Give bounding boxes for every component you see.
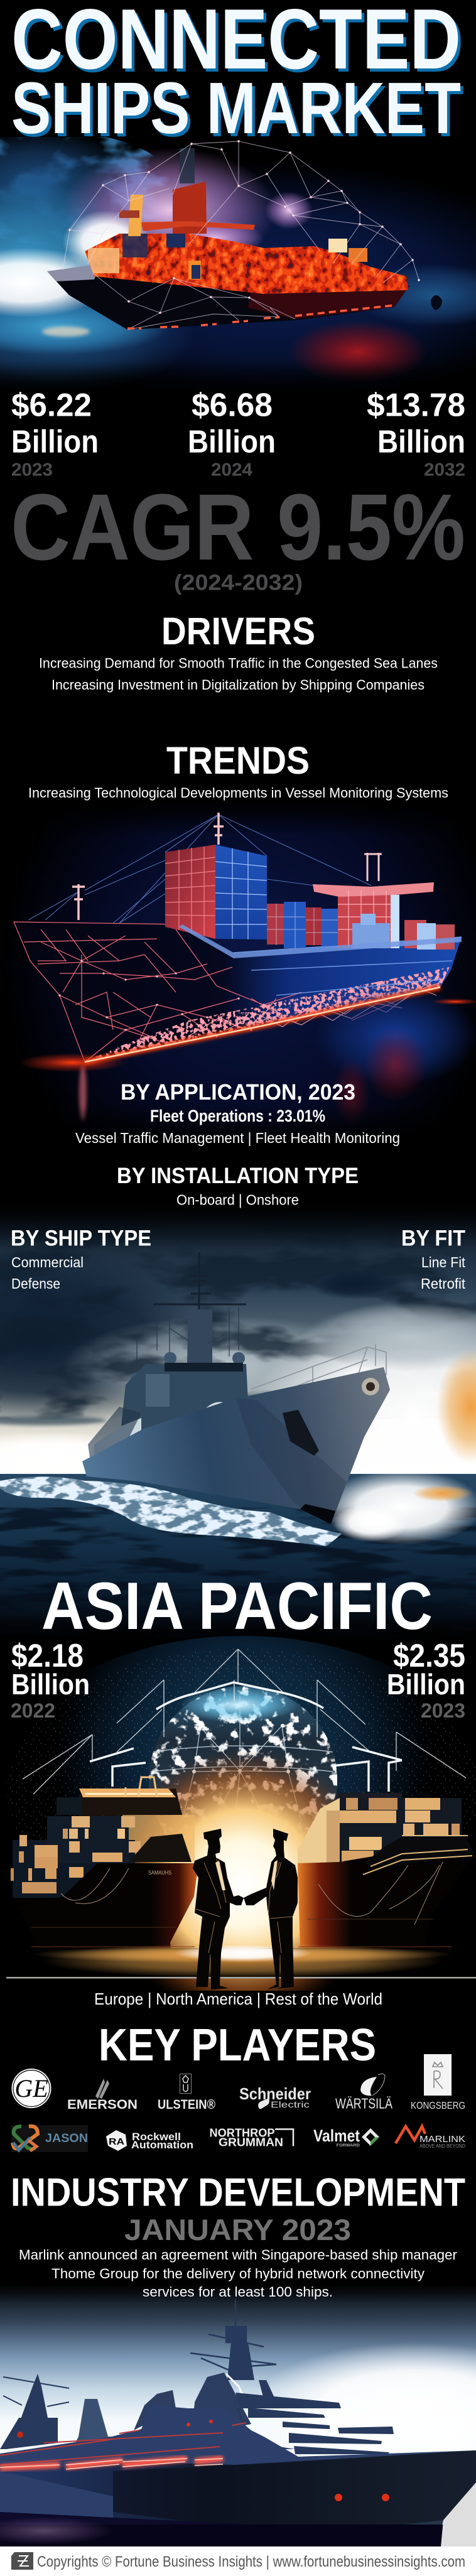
panel: drivers: DRIVERS <box>161 610 315 652</box>
stat: 2023 value <box>11 387 99 480</box>
dense lower mesh <box>90 967 450 1060</box>
panel: drivers: Increasing Demand for Smooth Traffic in the Congested Sea Lanes <box>39 656 438 671</box>
logo: GE <box>11 2069 51 2108</box>
logo: Jason: JASON <box>45 2132 88 2145</box>
superstructure and hull <box>0 2405 476 2534</box>
logo: Northrop Grumman: GRUMMAN <box>219 2136 283 2149</box>
title <box>11 0 461 149</box>
panel: trends: TRENDS <box>166 739 310 782</box>
panel: by ship type: Defense <box>11 1275 60 1292</box>
stays and masts <box>28 813 382 923</box>
stat: 2023 value: Billion <box>11 423 99 460</box>
ship bridge tower and crane <box>119 148 367 262</box>
cranes <box>23 1649 466 1794</box>
logo: Rockwell Automation: RA <box>109 2136 124 2147</box>
sea <box>0 1474 476 1642</box>
stat: 2024 value: 2024 <box>211 460 252 480</box>
bridge superstructure <box>313 882 455 950</box>
stat: 2024 value: $6.68 <box>192 387 273 423</box>
panel: industry development: services for at least 100 ships. <box>143 2284 333 2300</box>
panel: industry development: JANUARY 2023 <box>124 2213 351 2246</box>
bow wake foam <box>0 1477 402 1546</box>
logo: GE: GE <box>14 2074 48 2102</box>
panel: by fit: BY FIT <box>401 1226 465 1251</box>
logo: Kongsberg: KONGSBERG <box>411 2101 465 2111</box>
network mesh <box>63 141 419 330</box>
right ship <box>298 1793 474 1948</box>
logo: Valmet: Valmet <box>313 2126 360 2145</box>
logo: Ulstein: ULSTEIN® <box>158 2097 215 2112</box>
silhouette: left officer <box>193 1829 244 1989</box>
panel: trends <box>28 739 448 801</box>
main container stack <box>165 845 267 939</box>
hull <box>14 922 462 1062</box>
panel: market values <box>11 387 465 480</box>
globe <box>149 1686 337 1835</box>
central glow <box>129 1751 339 1991</box>
container stacks <box>85 234 408 294</box>
warship hull <box>82 1367 390 1524</box>
logo: Marlink: ABOVE AND BEYOND <box>419 2143 465 2149</box>
other regions text: Europe | North America | Rest of the World <box>94 1989 382 2008</box>
panel: by fit <box>401 1226 466 1292</box>
logo: Schneider Electric <box>239 2084 311 2109</box>
logo: Schneider Electric: Schneider <box>239 2084 311 2103</box>
water bottom <box>0 2512 440 2534</box>
logo: Northrop Grumman <box>210 2126 293 2149</box>
stat: 2032 value: 2032 <box>424 460 465 480</box>
logo: Emerson <box>67 2079 138 2112</box>
logo: Jason <box>11 2125 88 2152</box>
heading: Asia Pacific: ASIA PACIFIC <box>41 1568 433 1643</box>
stat: 2032 value <box>367 387 465 480</box>
panel: by ship type: Commercial <box>11 1254 84 1270</box>
heading: key players: KEY PLAYERS <box>99 2020 376 2070</box>
icon: Fortune Business Insights logo <box>11 2552 33 2570</box>
CAGR heading: (2024-2032) <box>174 570 303 595</box>
logo: Wartsila <box>335 2074 393 2111</box>
panel: by ship type <box>11 1226 151 1292</box>
hull mesh <box>14 922 433 1062</box>
stat: 2023 value: 2023 <box>11 460 53 480</box>
panel: globe and handshake image <box>0 1636 476 2019</box>
panel: Asia Pacific 2023 value: 2023 <box>421 1699 465 1722</box>
panel: by installation type <box>117 1163 359 1208</box>
panel: Asia Pacific 2022 value: $2.18 <box>11 1638 84 1674</box>
logo: Northrop Grumman: NORTHROP <box>210 2126 275 2139</box>
ground glow <box>0 1919 476 1978</box>
stat: 2024 value: Billion <box>188 423 276 460</box>
panel: by installation type: BY INSTALLATION TYPE <box>117 1163 359 1188</box>
red deck stripes <box>0 2423 246 2465</box>
panel: by application <box>75 1080 400 1146</box>
panel: Asia Pacific 2023 value <box>387 1638 465 1722</box>
footer <box>0 2546 476 2576</box>
panel: industry development: Marlink announced an agreement with Singapore-based ship manager <box>19 2247 458 2263</box>
panel: drivers: Increasing Investment in Digitalization by Shipping Companies <box>51 677 425 693</box>
panel: Asia Pacific 2022 value: Billion <box>11 1668 90 1701</box>
panel: by fit: Retrofit <box>421 1275 466 1292</box>
logo: Emerson: EMERSON <box>67 2097 138 2112</box>
panel: Asia Pacific 2022 value: 2022 <box>11 1699 55 1722</box>
mast rear ship <box>0 2374 112 2449</box>
stat: 2024 value <box>188 387 276 480</box>
panel: bottom warship image <box>0 2286 476 2546</box>
panel: by application: Fleet Operations : 23.01% <box>150 1107 325 1125</box>
deck base <box>179 924 462 958</box>
warship anchor and hawse <box>283 1378 379 1456</box>
logo: Wartsila: WÄRTSILÄ <box>335 2095 393 2111</box>
deck line and blue hull lights <box>234 937 462 995</box>
panel: industry development: Thome Group for the delivery of hybrid network connectivity <box>51 2266 425 2281</box>
panel: industry development <box>11 2170 465 2300</box>
logo: Rockwell Automation: Rockwell <box>132 2131 181 2143</box>
logo: Ulstein <box>158 2074 215 2112</box>
suit details <box>196 1859 293 1953</box>
glowing red lights <box>0 2420 389 2501</box>
silhouette: right officer <box>244 1829 298 1989</box>
logo: Kongsberg <box>411 2054 465 2111</box>
warship bow railing <box>251 1344 387 1389</box>
panel: Asia Pacific 2023 value: Billion <box>387 1668 465 1701</box>
stat: 2023 value: $6.22 <box>11 387 92 423</box>
panel: by application: BY APPLICATION, 2023 <box>121 1080 355 1105</box>
ship hull <box>47 271 409 330</box>
stat: 2032 value: $13.78 <box>367 387 465 423</box>
glowing keel line <box>85 987 440 1062</box>
panel: Asia Pacific 2023 value: $2.35 <box>393 1638 465 1674</box>
left ship: SAMAUHS <box>148 1870 171 1876</box>
stat: 2032 value: Billion <box>377 423 465 460</box>
logo: Marlink: MARLINK <box>419 2134 465 2145</box>
panel: hero image connected cargo ship <box>0 129 476 402</box>
logo: Rockwell Automation: Automation <box>131 2139 193 2151</box>
logo: Marlink <box>396 2126 465 2149</box>
warship mast and superstructure <box>88 1252 248 1473</box>
panel: wireframe ship image <box>0 804 476 1143</box>
panel: by application: Vessel Traffic Management | Fleet Health Monitoring <box>75 1130 400 1146</box>
panel: by fit: Line Fit <box>421 1254 466 1270</box>
panel: Asia Pacific 2022 value <box>11 1638 90 1722</box>
panel: by ship type: BY SHIP TYPE <box>11 1226 151 1251</box>
reflection <box>19 986 476 1127</box>
left ship <box>11 1777 198 1948</box>
logo: Schneider Electric: Electric <box>271 2099 310 2109</box>
panel: warship image <box>0 1206 476 1642</box>
logo: Rockwell Automation <box>106 2130 193 2151</box>
main mast and tower <box>134 2298 394 2454</box>
small container stacks <box>267 902 338 948</box>
waterline lights and reflection <box>42 295 442 383</box>
panel: trends: Increasing Technological Developments in Vessel Monitoring Systems <box>28 785 448 801</box>
logo: Valmet: FORWARD <box>337 2144 360 2148</box>
panel: by installation type: On-board | Onshore <box>176 1192 299 1208</box>
panel: company logos <box>11 2054 465 2152</box>
panel: drivers <box>39 610 438 693</box>
